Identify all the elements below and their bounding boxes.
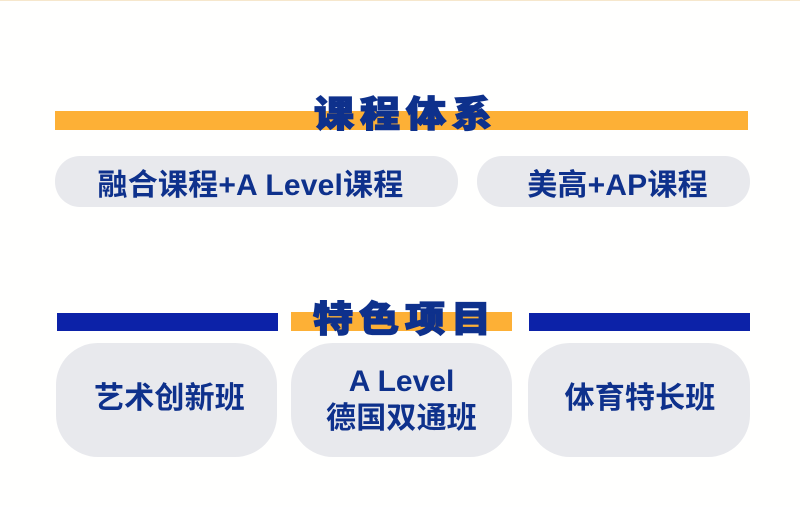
heading: featured programs: 特色项目 <box>313 290 497 342</box>
label: A Level line: A Level <box>349 365 454 398</box>
panel: curriculum system <box>55 85 750 207</box>
label: sports specialty class: 体育特长班 <box>564 382 716 415</box>
blue bar left <box>57 313 278 331</box>
card: A Level German dual-track class <box>291 343 512 457</box>
panel: featured programs <box>56 290 750 457</box>
label: integrated curriculum + A Level: 融合课程+A Level课程 <box>98 169 403 202</box>
orange bar centre <box>291 312 512 331</box>
heading: curriculum system: 课程体系 <box>314 85 498 137</box>
pill: US high school + AP <box>477 156 750 207</box>
pill: integrated curriculum + A Level <box>55 156 458 207</box>
card: sports specialty class <box>528 343 750 457</box>
orange heading bar <box>55 111 748 130</box>
label: art innovation class: 艺术创新班 <box>94 382 245 415</box>
label: German dual-track class: 德国双通班 <box>326 402 477 435</box>
card: art innovation class <box>56 343 277 457</box>
blue bar right <box>529 313 750 331</box>
label: US high school + AP: 美高+AP课程 <box>527 169 708 202</box>
